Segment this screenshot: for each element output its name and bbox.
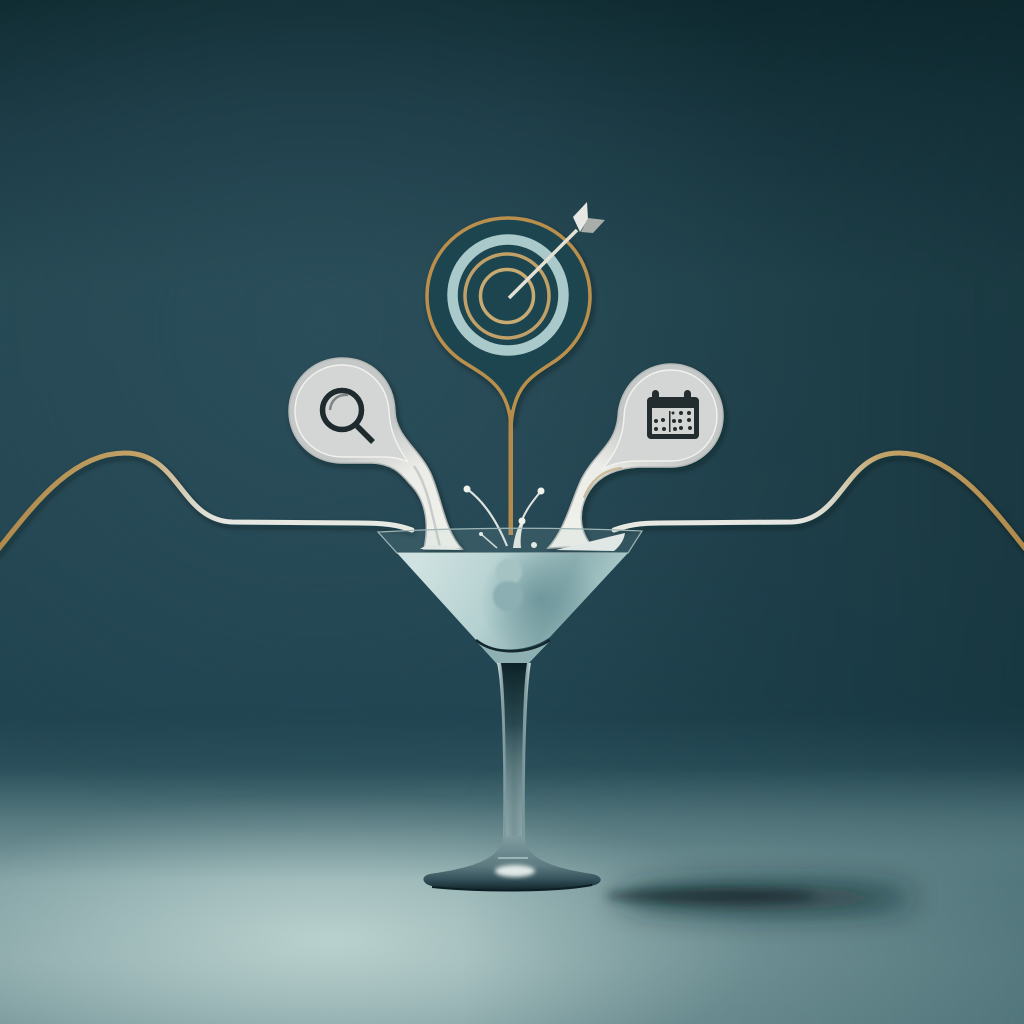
gold middle ring	[465, 254, 549, 338]
right stream and calendar bubble	[548, 364, 723, 548]
icon: magnifying glass	[322, 390, 373, 442]
base foot	[423, 836, 601, 891]
liquid shaded area	[397, 553, 628, 649]
stem	[497, 663, 531, 838]
martini glass	[378, 528, 642, 891]
bubble in liquid	[493, 559, 523, 611]
bowl neck	[476, 641, 550, 664]
light outer ring	[452, 240, 564, 350]
glass bowl upper rim	[378, 528, 642, 553]
splash droplets in centre	[464, 486, 544, 548]
stream tan edge	[584, 468, 622, 498]
glass cast shadow on floor	[605, 885, 915, 911]
pin outline: gold teardrop	[427, 218, 590, 425]
left stream and search bubble	[289, 358, 462, 549]
gold stem from pin into glass	[508, 410, 513, 535]
bubble body with milk tail	[548, 364, 723, 548]
left flowing line: gold to white into the glass	[0, 453, 412, 552]
lower bowl dark curve	[476, 640, 550, 651]
right flowing line: gold to white into the glass	[614, 453, 1024, 552]
bubble inner panel	[602, 370, 717, 470]
stream shading	[414, 466, 440, 547]
target pin with concentric rings and arrow	[427, 202, 605, 535]
foam highlights on liquid surface	[420, 533, 625, 551]
liquid cone	[397, 553, 628, 649]
arrow fletching	[573, 202, 605, 233]
arrow shaft	[509, 230, 577, 298]
bubble body with milk tail	[289, 358, 462, 549]
gold inner ring	[480, 270, 534, 322]
icon: calendar	[647, 390, 699, 439]
bubble inner panel	[295, 365, 408, 462]
